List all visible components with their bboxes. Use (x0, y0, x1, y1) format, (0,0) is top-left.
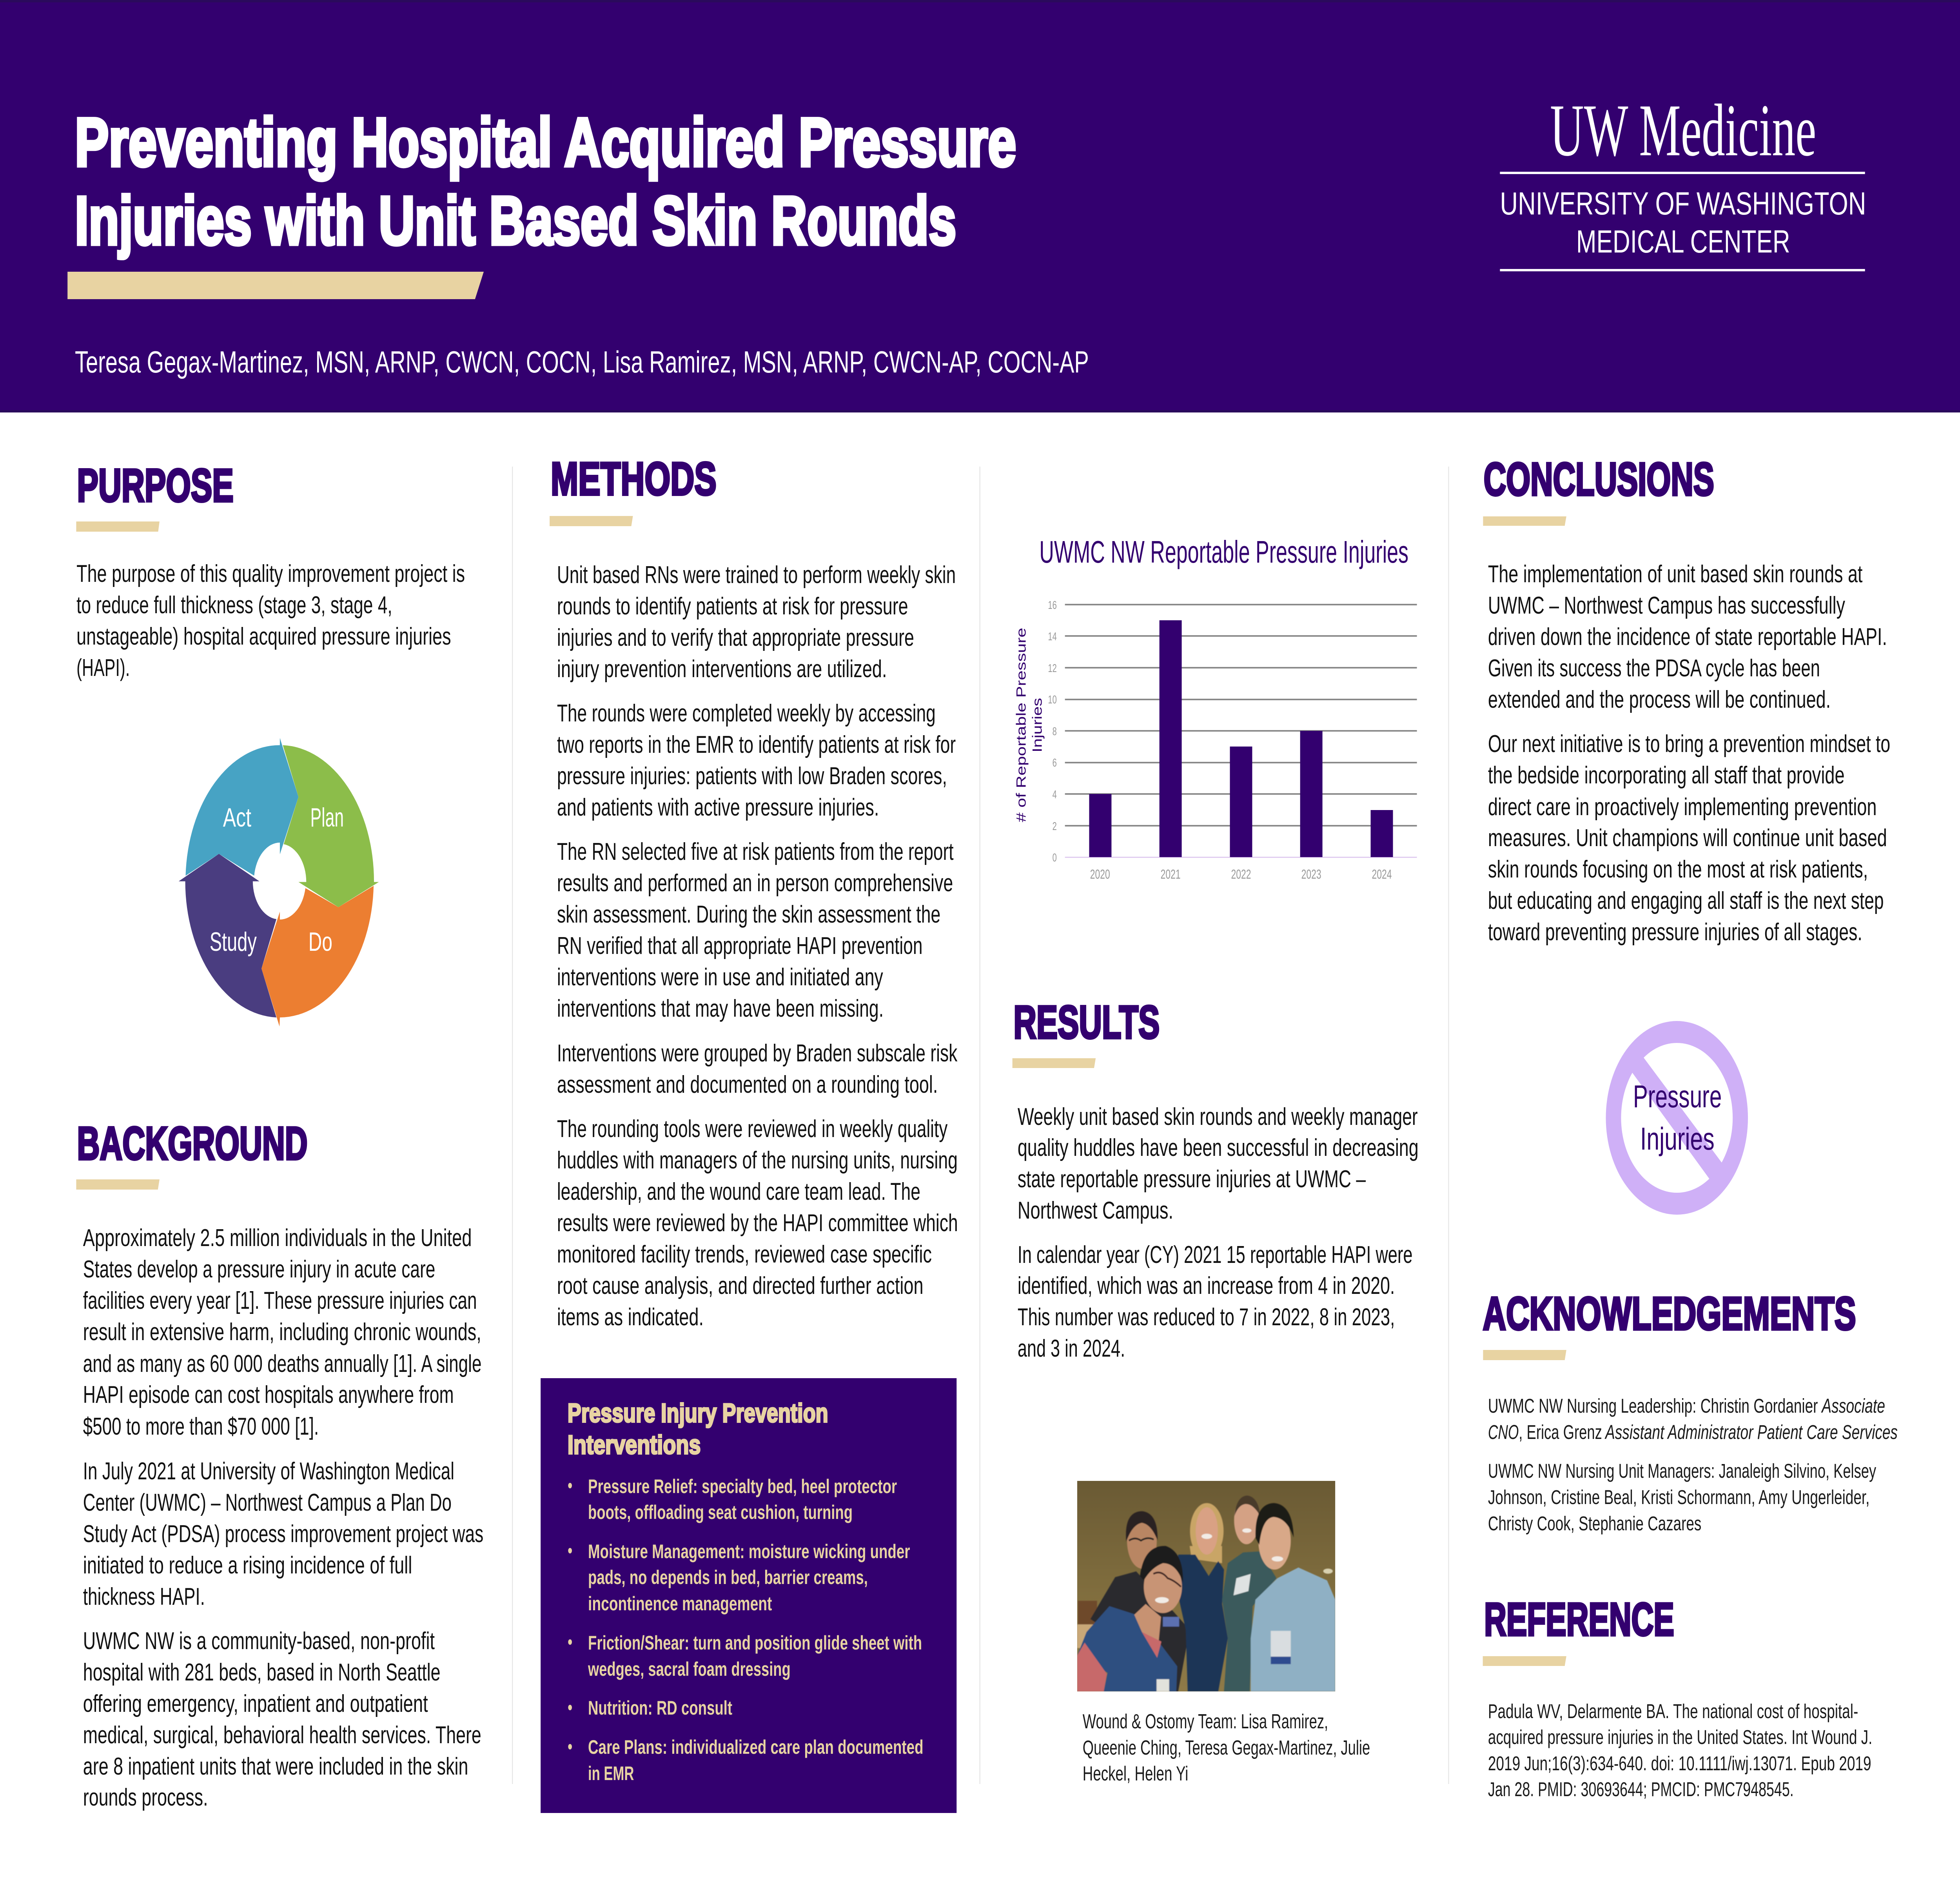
text: methods: The RN selected five at risk patients from the report (557, 838, 954, 865)
text: methods: monitored facility trends, reviewed case specific (557, 1241, 932, 1268)
text: acknowledgements: Christy Cook, Stephanie Cazares (1488, 1513, 1701, 1535)
y-axis ticks: 14 (1048, 630, 1057, 643)
text: reference: Padula WV, Delarmente BA. The national cost of hospital- (1488, 1700, 1858, 1723)
text: background: In July 2021 at University of Washington Medical (83, 1458, 454, 1485)
text: conclusions: the bedside incorporating all staff that provide (1488, 762, 1845, 789)
text: acknowledgements: , Erica Grenz (1519, 1421, 1602, 1444)
y-axis ticks: 2 (1053, 820, 1057, 833)
callout heading (568, 1399, 828, 1460)
text: methods: huddles with managers of the nursing units, nursing (557, 1147, 958, 1174)
caption: wound and ostomy team (1083, 1710, 1370, 1785)
text: background: hospital with 281 beds, based in North Seattle (83, 1659, 441, 1686)
panel: acknowledgements (1483, 1287, 1898, 1535)
x-axis labels: 2022 (1231, 867, 1251, 882)
text: methods (557, 561, 958, 1331)
heading: methods: METHODS (551, 452, 717, 505)
text: background: facilities every year [1]. These pressure injuries can (83, 1287, 477, 1314)
diagram: PDSA cycle wheel (179, 738, 379, 1026)
bullet list: Moisture Management: moisture wicking under (588, 1541, 910, 1563)
text: purpose: (HAPI). (76, 654, 130, 681)
title: Preventing Hospital Acquired Pressure (75, 104, 1016, 180)
text: background: thickness HAPI. (83, 1583, 205, 1610)
y-axis ticks: 0 (1053, 851, 1057, 864)
bar chart: UWMC NW reportable pressure injuries (1014, 534, 1417, 882)
text: results: Weekly unit based skin rounds and weekly manager (1018, 1103, 1418, 1130)
text: acknowledgements: Johnson, Cristine Beal, Kristi Schormann, Amy Ungerleider, (1488, 1486, 1869, 1509)
text: background: result in extensive harm, including chronic wounds, (83, 1319, 481, 1346)
diagram: PDSA cycle wheel: Plan (310, 803, 344, 832)
diagram: PDSA cycle wheel: Do (309, 927, 332, 957)
text: reference: acquired pressure injuries in the United States. Int Wound J. (1488, 1726, 1872, 1749)
heading: conclusions: CONCLUSIONS (1484, 453, 1714, 505)
text: background: offering emergency, inpatient and outpatient (83, 1690, 428, 1717)
logo: UW Medicine: MEDICAL CENTER (1576, 223, 1790, 259)
text: methods: pressure injuries: patients with low Braden scores, (557, 763, 947, 790)
bullet list: Friction/Shear: turn and position glide sheet with (588, 1632, 922, 1654)
text: background: are 8 inpatient units that were included in the skin (83, 1753, 468, 1780)
text: background: Study Act (PDSA) process improvement project was (83, 1520, 483, 1548)
text: conclusions: but educating and engaging all staff is the next step (1488, 887, 1884, 914)
authors: Teresa Gegax-Martinez, MSN, ARNP, CWCN, COCN, Lisa Ramirez, MSN, ARNP, CWCN-AP, COCN-AP (75, 345, 1089, 379)
bullet list (568, 1476, 924, 1785)
heading: reference: REFERENCE (1484, 1593, 1674, 1646)
bullet list: incontinence management (588, 1593, 772, 1615)
text: methods: assessment and documented on a rounding tool. (557, 1071, 938, 1098)
text: conclusions: UWMC – Northwest Campus has successfully (1488, 592, 1845, 619)
heading: acknowledgements: ACKNOWLEDGEMENTS (1483, 1287, 1856, 1340)
text: methods: Unit based RNs were trained to perform weekly skin (557, 561, 956, 589)
title (75, 104, 1016, 259)
panel: reference (1483, 1593, 1872, 1801)
text: acknowledgements: Assistant Administrator Patient Care Services (1604, 1421, 1898, 1444)
text: results: identified, which was an increase from 4 in 2020. (1018, 1272, 1395, 1299)
text: methods: injury prevention interventions are utilized. (557, 656, 887, 683)
x-axis labels: 2021 (1161, 867, 1181, 882)
x-axis labels (1090, 867, 1392, 882)
y-axis ticks: 6 (1053, 756, 1057, 769)
text: methods: results were reviewed by the HAPI committee which (557, 1210, 958, 1237)
bullet list: Nutrition: RD consult (588, 1697, 732, 1719)
icon: no pressure injuries sign (1606, 1021, 1748, 1215)
bullet list: Care Plans: individualized care plan documented (588, 1737, 924, 1758)
text: background: medical, surgical, behavioral health services. There (83, 1722, 481, 1749)
caption: wound and ostomy team: Wound & Ostomy Team: Lisa Ramirez, (1083, 1710, 1328, 1733)
text: background: and as many as 60 000 deaths annually [1]. A single (83, 1350, 481, 1377)
header banner (0, 0, 1960, 412)
title accent bar (67, 272, 484, 299)
y-axis ticks: 12 (1048, 662, 1057, 675)
text: conclusions: toward preventing pressure injuries of all stages. (1488, 919, 1862, 946)
text: methods: leadership, and the wound care team lead. The (557, 1178, 920, 1205)
text: purpose: unstageable) hospital acquired pressure injuries (76, 623, 451, 650)
text: background: HAPI episode can cost hospitals anywhere from (83, 1381, 454, 1408)
panel: methods (550, 452, 958, 1331)
text: results (1018, 1103, 1419, 1362)
text: methods: root cause analysis, and directed further action (557, 1272, 924, 1299)
chart title: UWMC NW Reportable Pressure Injuries (1039, 534, 1408, 569)
text: methods: and patients with active pressure injuries. (557, 794, 879, 821)
text: methods: RN verified that all appropriate HAPI prevention (557, 932, 922, 959)
text: methods: skin assessment. During the skin assessment the (557, 901, 940, 928)
text: conclusions: The implementation of unit based skin rounds at (1488, 561, 1863, 588)
panel: conclusions (1483, 453, 1890, 946)
diagram: PDSA cycle wheel: Study (210, 927, 257, 957)
text: conclusions (1488, 561, 1890, 946)
text: conclusions: driven down the incidence of state reportable HAPI. (1488, 623, 1887, 650)
text: acknowledgements (1488, 1395, 1898, 1535)
text: background: UWMC NW is a community-based, non-profit (83, 1628, 435, 1655)
text: background (83, 1224, 483, 1811)
panel: background (76, 1117, 483, 1811)
text: purpose (76, 560, 465, 681)
logo: UW Medicine (1500, 89, 1866, 271)
text: conclusions: Our next initiative is to bring a prevention mindset to (1488, 730, 1890, 758)
text: background: rounds process. (83, 1784, 208, 1811)
y-axis ticks: 10 (1048, 693, 1057, 706)
text: methods: rounds to identify patients at risk for pressure (557, 593, 908, 620)
text: acknowledgements: CNO (1488, 1421, 1519, 1444)
text: methods: Interventions were grouped by Braden subscale risk (557, 1040, 958, 1067)
text: conclusions: Given its success the PDSA cycle has been (1488, 655, 1820, 682)
caption: wound and ostomy team: Heckel, Helen Yi (1083, 1762, 1188, 1785)
y-axis title (1014, 628, 1045, 822)
text: conclusions: direct care in proactively implementing prevention (1488, 794, 1877, 821)
text: methods: interventions were in use and initiated any (557, 964, 883, 991)
text: methods: two reports in the EMR to identify patients at risk for (557, 731, 956, 758)
y-axis ticks: 8 (1053, 725, 1057, 738)
text: reference: Jan 28. PMID: 30693644; PMCID: PMC7948545. (1488, 1778, 1794, 1801)
bullet list: in EMR (588, 1763, 634, 1785)
text: results: and 3 in 2024. (1018, 1335, 1125, 1362)
text: methods: interventions that may have been missing. (557, 995, 884, 1022)
text: results: Northwest Campus. (1018, 1197, 1173, 1224)
text: reference: 2019 Jun;16(3):634-640. doi: 10.1111/iwj.13071. Epub 2019 (1488, 1753, 1871, 1775)
caption: wound and ostomy team: Queenie Ching, Teresa Gegax-Martinez, Julie (1083, 1737, 1370, 1759)
icon: no pressure injuries sign: Pressure (1633, 1079, 1722, 1114)
logo: UW Medicine: UW Medicine (1550, 89, 1816, 172)
bullet list: Pressure Relief: specialty bed, heel protector (588, 1476, 897, 1498)
text: purpose: to reduce full thickness (stage 3, stage 4, (76, 592, 392, 619)
y-axis ticks: 16 (1048, 599, 1057, 612)
text: background: initiated to reduce a rising incidence of full (83, 1552, 412, 1579)
panel: purpose (76, 459, 465, 681)
logo: UW Medicine: UNIVERSITY OF WASHINGTON (1500, 185, 1866, 221)
text: background: Approximately 2.5 million individuals in the United (83, 1224, 472, 1252)
y-axis title: Injuries (1030, 698, 1045, 752)
diagram: PDSA cycle wheel: Act (223, 803, 251, 832)
y-axis ticks (1048, 599, 1057, 864)
bars (1089, 620, 1393, 857)
text: methods: results and performed an in person comprehensive (557, 870, 953, 897)
text: results: This number was reduced to 7 in 2022, 8 in 2023, (1018, 1304, 1395, 1331)
y-axis ticks: 4 (1053, 788, 1057, 801)
heading: background: BACKGROUND (77, 1117, 308, 1170)
text: methods: injuries and to verify that appropriate pressure (557, 624, 914, 651)
callout: pressure injury prevention interventions (541, 1378, 956, 1813)
x-axis labels: 2023 (1301, 867, 1321, 882)
heading: results: RESULTS (1013, 996, 1160, 1048)
text: methods: The rounds were completed weekly by accessing (557, 700, 936, 727)
text: conclusions: extended and the process will be continued. (1488, 686, 1831, 713)
text: methods: The rounding tools were reviewed in weekly quality (557, 1115, 948, 1143)
text: results: state reportable pressure injuries at UWMC – (1018, 1166, 1366, 1193)
text: purpose: The purpose of this quality improvement project is (76, 560, 465, 587)
y-axis title: # of Reportable Pressure (1014, 628, 1029, 822)
text: results: In calendar year (CY) 2021 15 reportable HAPI were (1018, 1241, 1412, 1268)
heading: purpose: PURPOSE (77, 459, 234, 512)
icon: no pressure injuries sign: Injuries (1640, 1121, 1715, 1156)
text: reference (1488, 1700, 1872, 1801)
text: conclusions: measures. Unit champions will continue unit based (1488, 825, 1887, 852)
x-axis labels: 2024 (1372, 867, 1392, 882)
x-axis labels: 2020 (1090, 867, 1110, 882)
bullet list: wedges, sacral foam dressing (588, 1659, 791, 1680)
text: results: quality huddles have been successful in decreasing (1018, 1134, 1419, 1161)
text: acknowledgements: UWMC NW Nursing Leadership: Christin Gordanier (1488, 1395, 1818, 1417)
text: background: Center (UWMC) – Northwest Campus a Plan Do (83, 1489, 452, 1516)
bullet list: boots, offloading seat cushion, turning (588, 1502, 853, 1524)
text: acknowledgements: UWMC NW Nursing Unit Managers: Janaleigh Silvino, Kelsey (1488, 1460, 1876, 1482)
text: conclusions: skin rounds focusing on the most at risk patients, (1488, 856, 1868, 883)
text: background: $500 to more than $70 000 [1]. (83, 1413, 319, 1440)
text: background: States develop a pressure injury in acute care (83, 1256, 435, 1283)
title: Injuries with Unit Based Skin Rounds (75, 182, 956, 259)
callout heading: Pressure Injury Prevention (568, 1399, 828, 1428)
callout heading: Interventions (568, 1430, 701, 1460)
text: acknowledgements: Associate (1821, 1395, 1885, 1417)
panel: results (1013, 996, 1419, 1362)
text: methods: items as indicated. (557, 1304, 704, 1331)
photo: wound and ostomy team (1077, 1481, 1335, 1691)
bullet list: pads, no depends in bed, barrier creams, (588, 1567, 868, 1589)
